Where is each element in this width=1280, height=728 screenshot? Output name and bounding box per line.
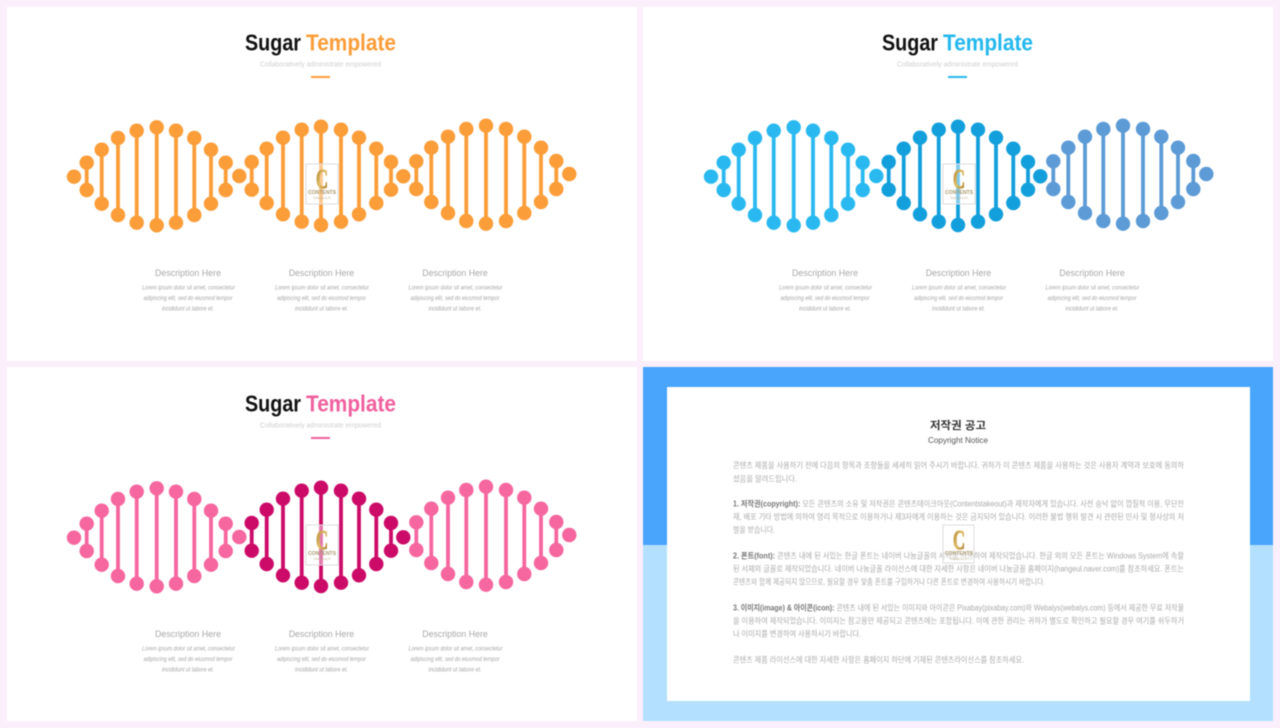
logo watermark: CONTENTS	[945, 190, 974, 196]
logo watermark: CONTENTS	[945, 551, 974, 557]
title underline	[948, 76, 967, 78]
logo watermark: C	[953, 525, 965, 555]
description column 1: incididunt ut labore et.	[799, 306, 851, 312]
description column 1: Lorem ipsum dolor sit amet, consectetur	[779, 286, 873, 292]
description column 3	[408, 268, 503, 312]
description column 2: Description Here	[926, 268, 991, 278]
DNA helix: pink left	[67, 481, 246, 594]
description column 2: adipiscing elit, sed do eiusmod tempor	[277, 657, 367, 663]
notice item 1: copyright: 벌을 받습니다.	[733, 524, 775, 534]
description column 3: adipiscing elit, sed do eiusmod tempor	[410, 657, 500, 663]
description column 3: incididunt ut labore et.	[428, 306, 482, 312]
description column 3: incididunt ut labore et.	[1066, 306, 1118, 312]
logo watermark	[306, 164, 338, 204]
title	[245, 30, 396, 56]
description column 2: adipiscing elit, sed do eiusmod tempor	[914, 296, 1004, 302]
DNA helix: steel blue right	[1046, 118, 1214, 231]
notice item 2: font	[733, 550, 1185, 586]
description column 2: incididunt ut labore et.	[295, 306, 348, 312]
description column 3: Description Here	[1059, 268, 1125, 278]
description column 3	[1046, 268, 1140, 312]
notice item 1: copyright: 1. 저작권(copyright): 모든 콘텐츠의 소유 및 저작권은 콘텐츠테이크아웃(Contentstakeout)과 제작자에게 있습니다. 사전 승낙 없이 껍질적 이용, 무단전	[733, 498, 1184, 508]
description column 2: incididunt ut labore et.	[932, 306, 985, 312]
description column 2: Lorem ipsum dolor sit amet, consectetur	[275, 286, 370, 292]
description column 1: Lorem ipsum dolor sit amet, consectetur	[142, 286, 236, 292]
title: Template	[306, 30, 396, 56]
logo watermark	[306, 525, 338, 565]
logo watermark: CONTENTS	[308, 551, 337, 557]
description column 1: adipiscing elit, sed do eiusmod tempor	[780, 296, 870, 302]
description column 3: Lorem ipsum dolor sit amet, consectetur	[408, 646, 503, 652]
notice intro	[733, 460, 1185, 484]
notice item 2: font: 된 서체의 글꼴로 제작되었습니다. 네이버 나눔글꼴 라이선스에 대한 자세한 사항은 네이버 나눔글꼴 홈페이지(hangeul.naver.com)를 참조하세요. 폰트는	[733, 564, 1184, 574]
logo watermark: C	[953, 164, 965, 194]
notice item 2: font: 콘텐츠와 함께 제공되지 않으므로, 필요할 경우 맞춤 폰트를 구입하거나 다른 폰트로 변경하여 사용하시기 바랍니다.	[733, 576, 1045, 586]
logo watermark: CONTENTS	[308, 190, 337, 196]
description column 1: incididunt ut labore et.	[162, 668, 214, 674]
description column 1: adipiscing elit, sed do eiusmod tempor	[144, 296, 233, 302]
description column 2	[275, 268, 370, 312]
logo watermark: TAKEOUT	[950, 196, 968, 200]
description column 1: Description Here	[155, 268, 221, 278]
DNA helix: crimson middle	[244, 480, 410, 593]
title: Sugar	[245, 390, 301, 416]
title underline	[311, 437, 330, 439]
notice intro: 셨음을 알려드립니다.	[733, 474, 797, 484]
title underline	[311, 76, 330, 78]
description column 1	[779, 268, 873, 312]
description column 1	[142, 268, 236, 312]
notice item 3: image and icon: 3. 이미지(image) & 아이콘(icon): 콘텐츠 내에 된 서있는 이미지와 아이콘은 Pixabay(pixabay.com)와 Webalys(webalys.com) 등에서 제공한 무료 저작물	[733, 602, 1184, 612]
description column 2: Description Here	[289, 268, 354, 278]
logo watermark: TAKEOUT	[950, 557, 968, 561]
title: Template	[306, 390, 396, 416]
panel: copyright notice	[643, 367, 1273, 721]
description column 1: incididunt ut labore et.	[162, 306, 214, 312]
DNA helix: orange right	[409, 118, 576, 231]
title: Template	[943, 30, 1033, 56]
DNA helix: orange left	[67, 120, 246, 232]
description column 1: Lorem ipsum dolor sit amet, consectetur	[142, 646, 236, 652]
description column 2	[912, 268, 1007, 312]
logo watermark	[943, 525, 974, 563]
description column 2	[275, 629, 370, 674]
DNA helix: pink right	[409, 480, 576, 592]
description column 3: adipiscing elit, sed do eiusmod tempor	[410, 296, 500, 302]
logo watermark: C	[316, 525, 328, 555]
description column 1: Description Here	[155, 629, 221, 639]
description column 2: adipiscing elit, sed do eiusmod tempor	[277, 296, 367, 302]
panel: pink DNA slide	[7, 367, 637, 721]
DNA helix: orange middle	[244, 120, 410, 232]
subtitle: Collaboratively administrate empowered	[260, 422, 381, 430]
title: Sugar	[245, 30, 301, 56]
notice item 3: image and icon: 나 이미지를 변경하여 사용하시기 바랍니다.	[733, 628, 861, 638]
subtitle: Collaboratively administrate empowered	[897, 62, 1018, 68]
notice item 2: font: 2. 폰트(font): 콘텐츠 내에 된 서있는 한글 폰트는 네이버 나눔글꼴의 서체를 사용하여 제작되었습니다. 한글 외의 모든 폰트는 Windows System에 속할	[733, 550, 1185, 560]
description column 3: Lorem ipsum dolor sit amet, consectetur	[1046, 286, 1140, 292]
DNA helix: light blue left	[704, 120, 884, 232]
title	[882, 30, 1033, 56]
title	[245, 390, 396, 416]
logo watermark	[943, 164, 975, 204]
DNA helix: mid blue middle	[882, 120, 1048, 232]
notice heading: 저작권 공고	[930, 418, 986, 432]
title: Sugar	[882, 30, 938, 56]
description column 1: Description Here	[792, 268, 858, 278]
notice subheading: Copyright Notice	[928, 436, 989, 445]
notice footer line: 콘텐츠 제품 라이선스에 대한 자세한 사항은 홈페이지 하단에 기재된 콘텐츠라이선스를 참조하세요.	[733, 654, 1024, 664]
panel: orange DNA slide	[7, 7, 637, 361]
description column 2: incididunt ut labore et.	[295, 668, 348, 674]
description column 1	[142, 629, 236, 674]
description column 3: Lorem ipsum dolor sit amet, consectetur	[408, 286, 503, 292]
description column 3: incididunt ut labore et.	[428, 668, 482, 674]
description column 2: Description Here	[289, 629, 354, 639]
description column 2: Lorem ipsum dolor sit amet, consectetur	[912, 286, 1007, 292]
description column 2: Lorem ipsum dolor sit amet, consectetur	[275, 646, 370, 652]
description column 3: Description Here	[422, 629, 488, 639]
notice item 3: image and icon	[733, 602, 1184, 638]
description column 3: adipiscing elit, sed do eiusmod tempor	[1048, 296, 1137, 302]
logo watermark: TAKEOUT	[313, 557, 331, 561]
notice item 1: copyright	[733, 498, 1184, 534]
notice intro: 콘텐츠 제품을 사용하기 전에 다음의 항목과 조항들을 세세히 읽어 주시기 바랍니다. 귀하가 이 콘텐츠 제품을 사용하는 것은 사용자 계약과 보호에 동의하	[733, 460, 1185, 470]
description column 1: adipiscing elit, sed do eiusmod tempor	[144, 657, 233, 663]
subtitle: Collaboratively administrate empowered	[260, 62, 381, 68]
notice item 3: image and icon: 을 이용하여 제작되었습니다. 이미지는 참고용만 제공되고 콘텐츠에는 포함됩니다. 이에 관한 권리는 귀하가 별도로 확인하고 필요할 경우 여기를 쉬두하거	[733, 616, 1184, 626]
logo watermark: TAKEOUT	[313, 196, 331, 200]
panel: blue DNA slide	[643, 7, 1273, 361]
logo watermark: C	[316, 164, 328, 194]
notice item 1: copyright: 재, 배포 기타 방법에 의하여 영리 목적으로 이용하거나 제3자에게 이용하는 것은 금지되어 있습니다. 이러한 불법 행위 발견 시 관련된 민사 및 형사상의 처	[733, 512, 1184, 522]
description column 3	[408, 629, 503, 674]
description column 3: Description Here	[422, 268, 488, 278]
